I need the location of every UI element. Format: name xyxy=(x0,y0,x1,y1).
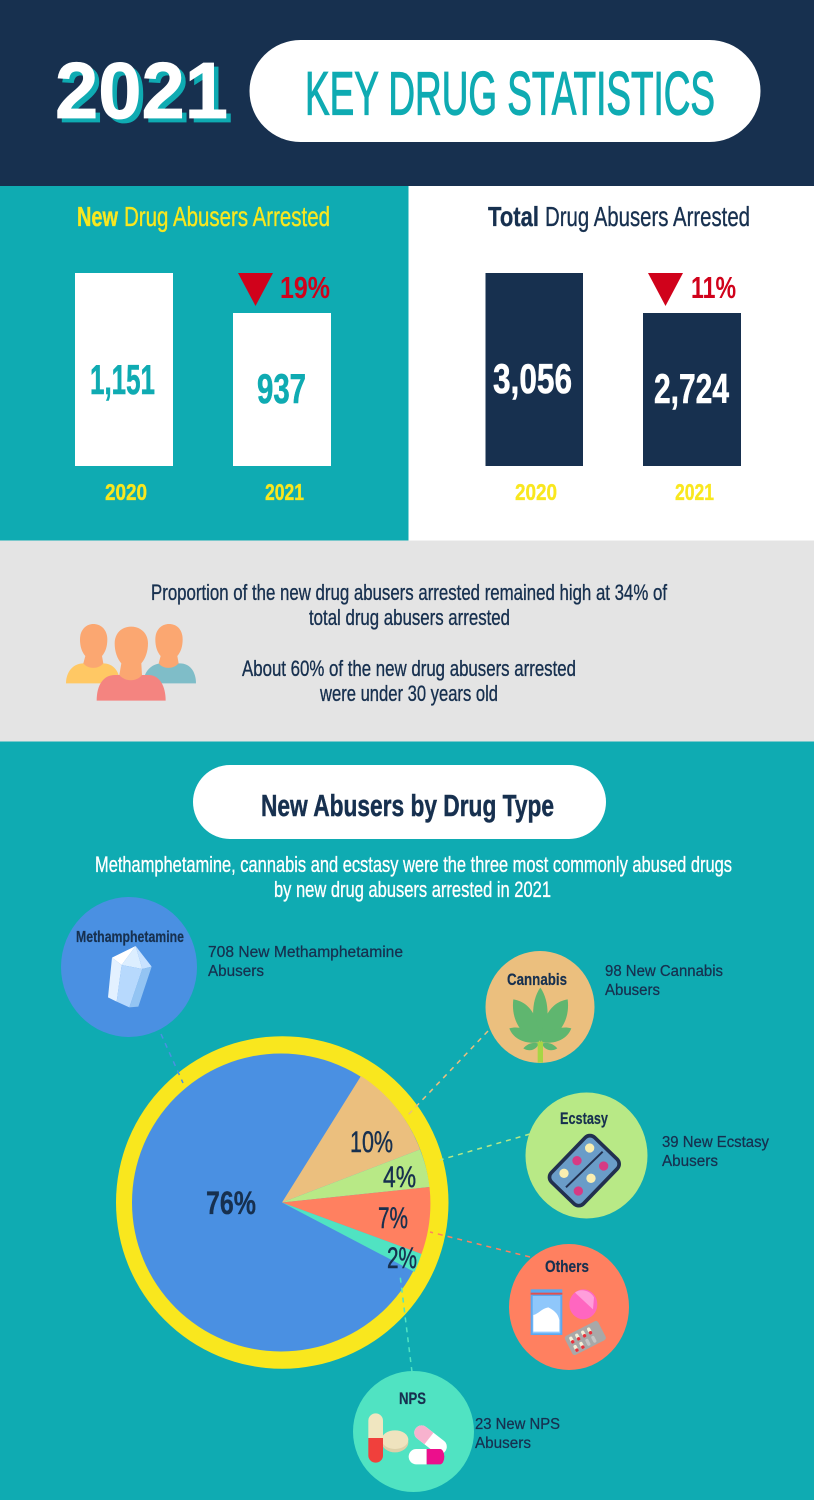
header band xyxy=(0,0,814,186)
icon: powder bag, pill, blister xyxy=(531,1289,607,1356)
text: proportion xyxy=(151,580,668,630)
callout: methamphetamine xyxy=(61,897,403,1037)
heading: total drug abusers: Total xyxy=(488,201,539,232)
intro text xyxy=(95,852,732,902)
year labels: 2020 xyxy=(105,479,147,505)
yellow ring xyxy=(116,1036,448,1369)
callout: others xyxy=(509,1244,629,1370)
icon: capsules and tablet xyxy=(368,1413,450,1464)
icon: crystal xyxy=(108,946,152,1007)
callout: methamphetamine: Abusers xyxy=(208,963,264,980)
callout: cannabis xyxy=(486,951,723,1063)
bar 2020 xyxy=(75,273,173,466)
callout: methamphetamine: Methamphetamine xyxy=(76,929,184,946)
bar 2021 xyxy=(233,313,331,466)
year labels: 2020 xyxy=(515,479,557,505)
icon: group of people xyxy=(66,624,196,701)
year 2021: 2021 xyxy=(55,46,228,135)
icon: cannabis leaf xyxy=(509,988,571,1063)
text: age: About 60% of the new drug abusers arrested xyxy=(242,656,576,681)
callout: others: Others xyxy=(545,1257,589,1276)
callout: ecstasy: Abusers xyxy=(662,1153,718,1170)
bar 2020 xyxy=(486,273,583,466)
callout: ecstasy: Ecstasy xyxy=(560,1109,608,1128)
slice: others xyxy=(282,1187,430,1254)
percentage labels: 4% xyxy=(383,1161,416,1194)
change: down 11% xyxy=(648,270,736,306)
connector lines xyxy=(161,1031,530,1372)
heading: new drug abusers xyxy=(77,201,330,232)
year labels xyxy=(515,479,714,505)
change: down 19%: 19% xyxy=(280,270,330,305)
pie chart xyxy=(116,1036,448,1369)
callout: nps: Abusers xyxy=(475,1435,531,1452)
bar 2021: 937 xyxy=(257,365,306,412)
bar 2020: 1,151 xyxy=(90,356,155,403)
bar 2021: 2,724 xyxy=(654,365,729,412)
callout: nps xyxy=(353,1371,560,1492)
slice: nps xyxy=(282,1202,422,1272)
callout: ecstasy xyxy=(526,1092,769,1218)
year labels: 2021 xyxy=(675,479,714,505)
callout: ecstasy: 39 New Ecstasy xyxy=(662,1134,769,1151)
bar 2021 xyxy=(643,313,741,466)
heading pill: new abusers by drug type xyxy=(193,765,606,839)
panel: total drug abusers arrested xyxy=(408,186,814,540)
heading: new drug abusers: Drug Abusers Arrested xyxy=(124,201,330,232)
text: age xyxy=(242,656,576,706)
percentage labels xyxy=(206,1126,417,1275)
title pill xyxy=(250,40,760,142)
change: down 19% xyxy=(238,270,330,306)
year labels xyxy=(105,479,304,505)
icon: blister pack xyxy=(547,1133,622,1208)
panel: new drug abusers arrested xyxy=(0,186,408,540)
heading pill: new abusers by drug type: New Abusers by Drug Type xyxy=(261,788,554,823)
slice: ecstasy xyxy=(282,1150,430,1202)
percentage labels: 7% xyxy=(378,1202,408,1235)
percentage labels: 10% xyxy=(350,1126,393,1159)
callout: methamphetamine: 708 New Methamphetamine xyxy=(208,944,403,961)
heading: new drug abusers: New xyxy=(77,201,118,232)
callout: cannabis: 98 New Cannabis xyxy=(605,963,723,980)
change: down 11%: 11% xyxy=(691,270,736,305)
year labels: 2021 xyxy=(265,479,304,505)
heading: total drug abusers xyxy=(488,201,750,232)
bar 2020: 3,056 xyxy=(493,355,572,402)
callout: cannabis: Cannabis xyxy=(507,970,567,989)
callout: cannabis: Abusers xyxy=(605,982,660,999)
percentage labels: 76% xyxy=(206,1185,256,1221)
slice: cannabis xyxy=(282,1076,420,1202)
percentage labels: 2% xyxy=(387,1242,417,1275)
callout: nps: NPS xyxy=(399,1389,426,1408)
year 2021: 2021 xyxy=(60,50,232,139)
slice: methamphetamine xyxy=(132,1054,430,1352)
text: age: were under 30 years old xyxy=(319,681,498,706)
text: proportion: total drug abusers arrested xyxy=(309,605,510,630)
intro text: by new drug abusers arrested in 2021 xyxy=(274,877,551,902)
callout: nps: 23 New NPS xyxy=(475,1416,560,1433)
panel: proportion note xyxy=(0,540,814,742)
